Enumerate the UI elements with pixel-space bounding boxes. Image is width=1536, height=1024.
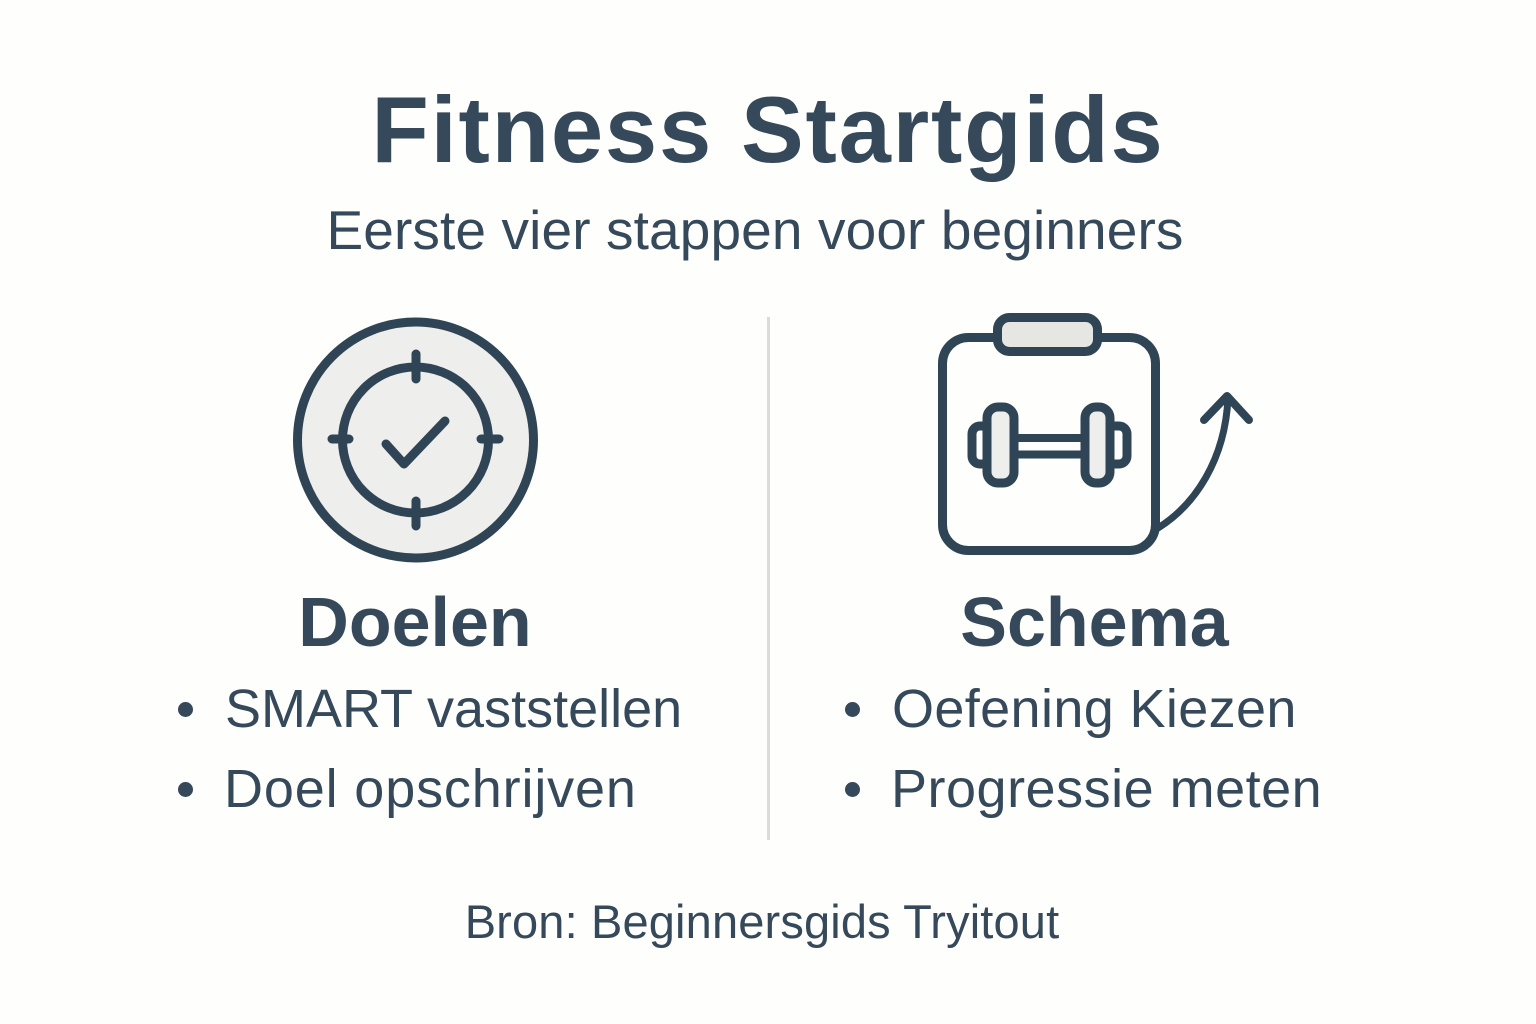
heading: Schema: Schema (960, 583, 1229, 661)
subtitle: Eerste vier stappen voor beginners (326, 199, 1184, 261)
icon: target with check (293, 318, 538, 562)
bullet: SMART vaststellen: SMART vaststellen (225, 679, 682, 739)
bullet: Doel opschrijven: Doel opschrijven (224, 759, 637, 819)
divider (767, 317, 770, 840)
panel: Schema (845, 313, 1322, 819)
source note: Bron: Beginnersgids Tryitout (465, 895, 1059, 948)
panel: Doelen (178, 318, 682, 819)
bullet: Oefening Kiezen: Oefening Kiezen (892, 679, 1297, 739)
icon: clipboard with dumbbell and arrow (938, 313, 1253, 555)
bullet: Progressie meten: Progressie meten (891, 759, 1322, 819)
heading: Doelen: Doelen (298, 583, 532, 661)
title: Fitness Startgids (371, 77, 1165, 182)
